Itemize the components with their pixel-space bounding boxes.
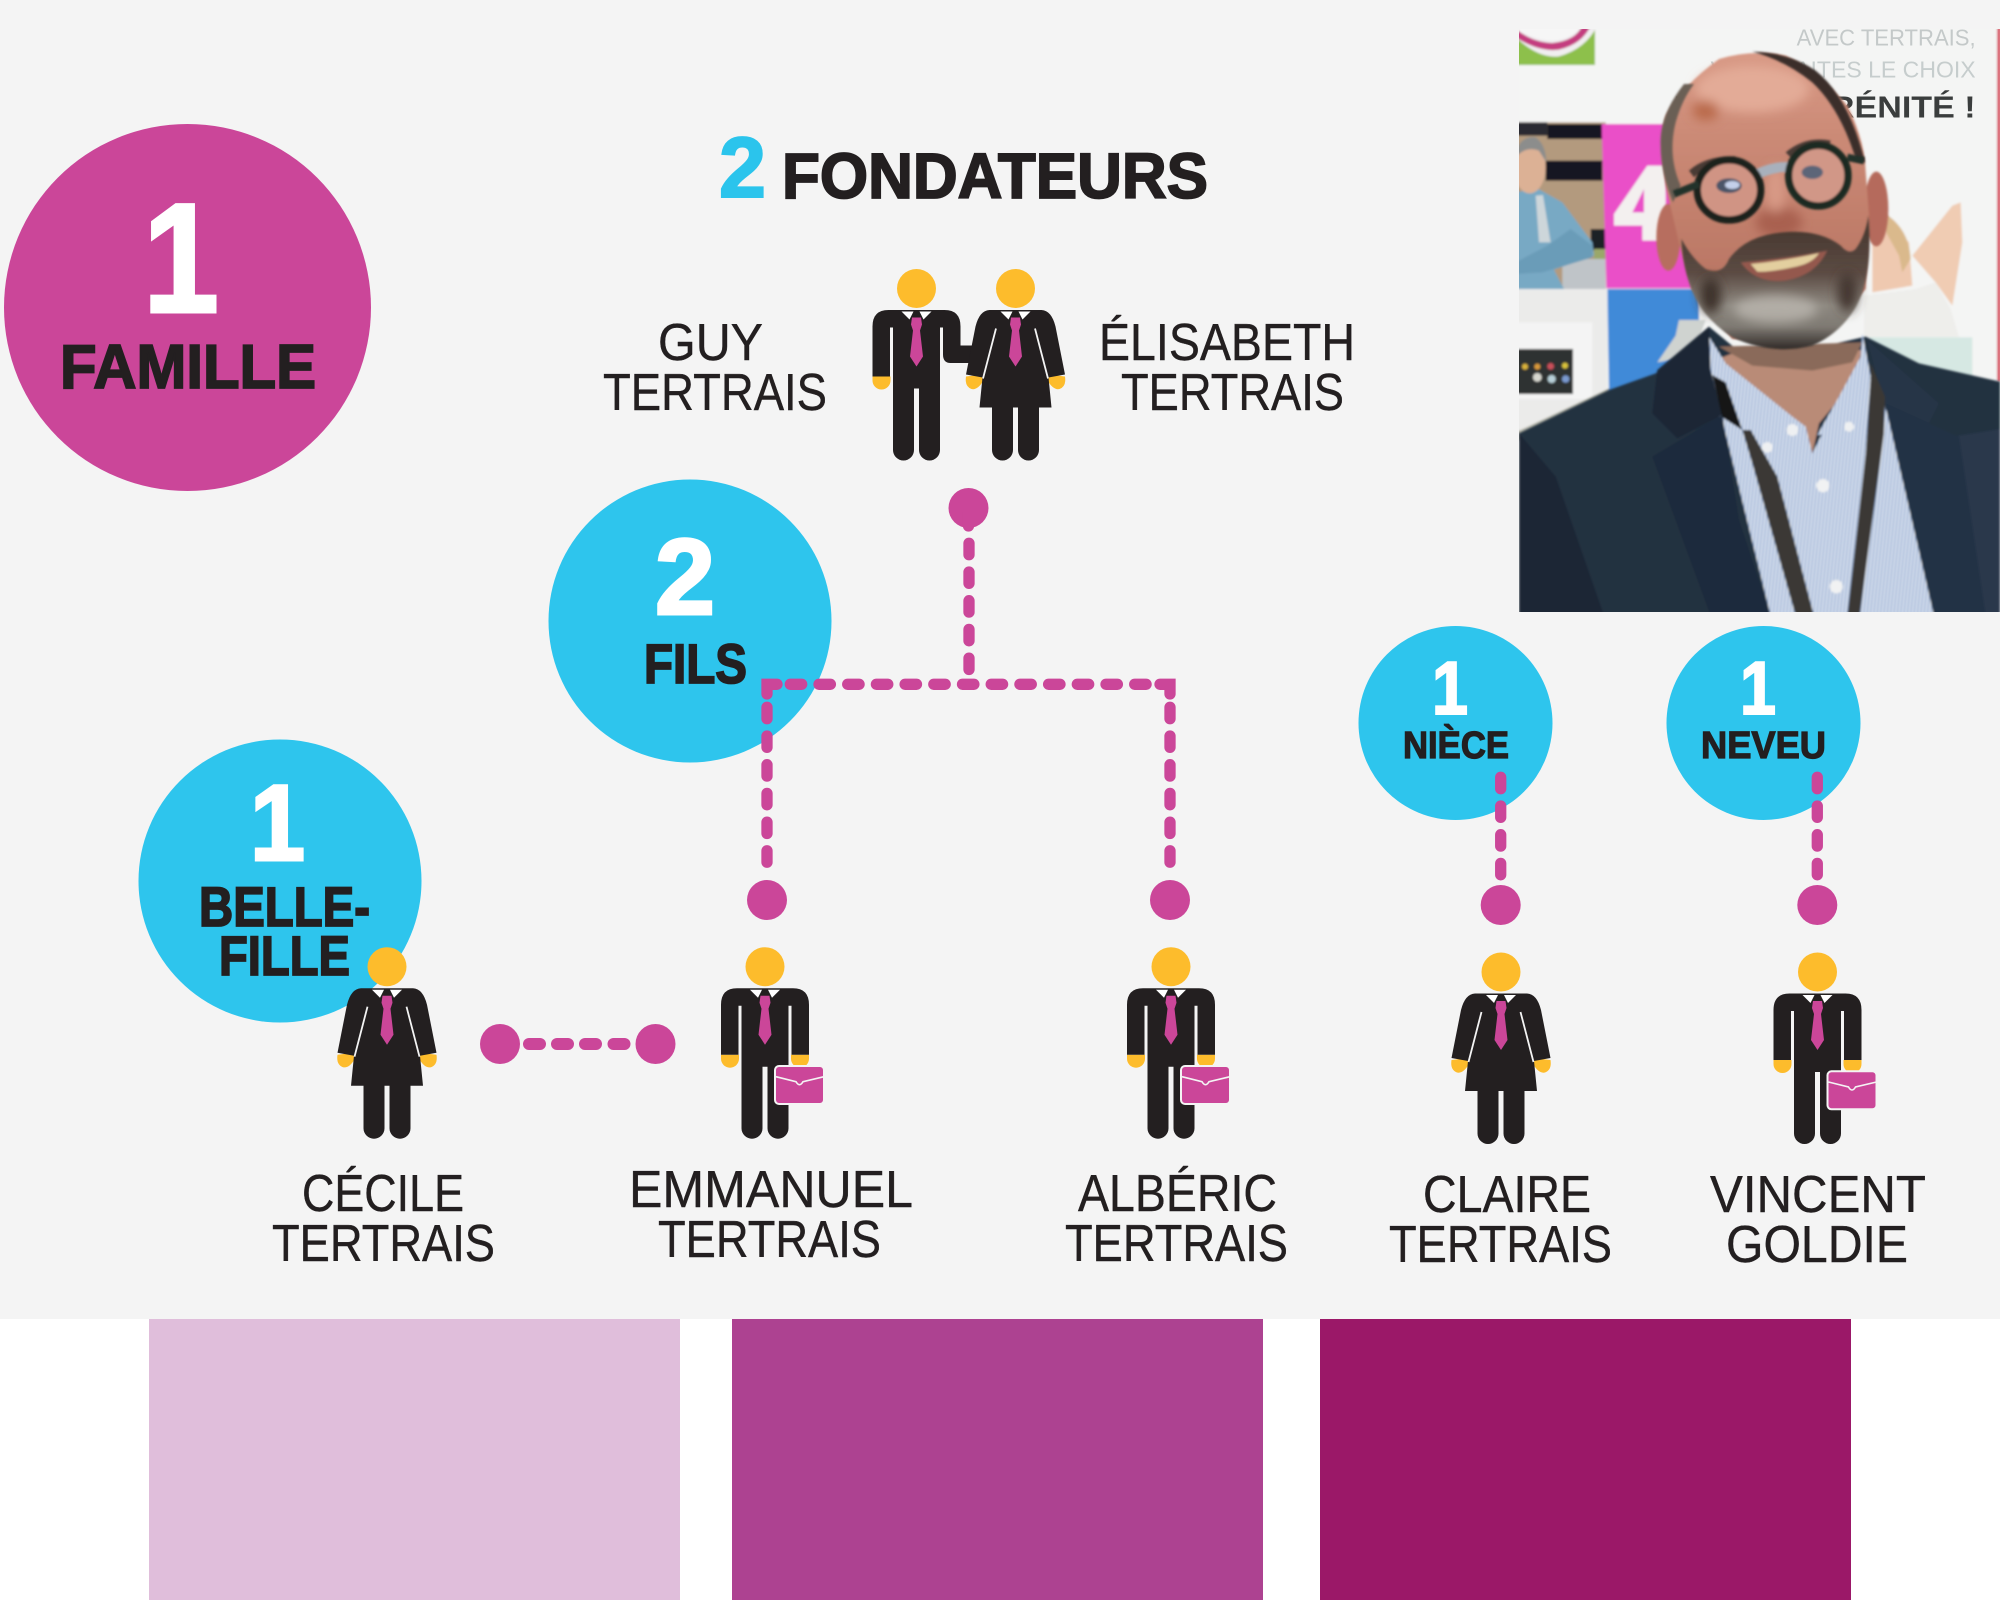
label: Claire Tertrais: CLAIRE: [1423, 1166, 1591, 1224]
badge: 1 belle-fille: [138, 740, 422, 1022]
badge: 1 nièce: [1358, 626, 1552, 820]
badge: 1 belle-fille: 1: [250, 762, 305, 883]
label: Cécile Tertrais: TERTRAIS: [272, 1215, 495, 1273]
badge: 1 neveu: [1666, 626, 1860, 820]
label: Cécile Tertrais: CÉCILE: [302, 1165, 464, 1223]
title: 2 fondateurs: FONDATEURS: [782, 140, 1208, 212]
title: 2 fondateurs: 2: [719, 121, 766, 216]
badge: 1 famille: [4, 124, 371, 491]
label: Albéric Tertrais: ALBÉRIC: [1078, 1165, 1277, 1223]
badge: 1 famille: FAMILLE: [60, 333, 316, 402]
label: Vincent Goldie: GOLDIE: [1726, 1216, 1908, 1274]
label: Cécile Tertrais: [272, 1165, 495, 1273]
poster text behind the man: VOUS FAITES LE CHOIX: [1711, 56, 1976, 82]
icon: Claire: [1451, 952, 1551, 1144]
icon: Albéric with briefcase: [1127, 947, 1230, 1139]
badge: 1 neveu: 1: [1740, 646, 1776, 730]
icon: Cécile: [337, 947, 437, 1139]
label: Vincent Goldie: [1710, 1166, 1926, 1274]
badge: 2 fils: 2: [655, 516, 715, 637]
label: Guy Tertrais: [603, 314, 827, 422]
colour swatch: mid magenta: [732, 1319, 1263, 1600]
badge: 1 belle-fille: FILLE: [219, 924, 350, 987]
label: Guy Tertrais: TERTRAIS: [603, 364, 827, 422]
badge: 1 nièce: 1: [1432, 646, 1468, 730]
label: Élisabeth Tertrais: [1099, 314, 1355, 422]
label: Élisabeth Tertrais: ÉLISABETH: [1099, 314, 1355, 372]
poster text behind the man: DE LA SÉRÉNITÉ !: [1674, 89, 1976, 124]
photo: portrait of a smiling man: [1514, 25, 2000, 616]
label: Emmanuel Tertrais: TERTRAIS: [658, 1211, 881, 1269]
connector: niece: [1481, 777, 1521, 925]
icon: Emmanuel with briefcase: [721, 947, 824, 1139]
badge: 1 neveu: NEVEU: [1701, 725, 1826, 767]
colour swatch: dark magenta: [1320, 1319, 1851, 1600]
colour swatch: light mauve: [149, 1319, 680, 1600]
label: Vincent Goldie: VINCENT: [1710, 1166, 1926, 1224]
label: Emmanuel Tertrais: EMMANUEL: [629, 1161, 913, 1219]
icon: Vincent with briefcase: [1774, 952, 1876, 1144]
badge: 2 fils: FILS: [644, 632, 747, 695]
badge: 1 famille: 1: [143, 172, 219, 346]
connector: family tree from founders to sons: [747, 488, 1190, 920]
badge: 2 fils: [548, 480, 832, 762]
badge: 1 nièce: NIÈCE: [1403, 723, 1509, 767]
label: Albéric Tertrais: TERTRAIS: [1065, 1215, 1288, 1273]
poster text behind the man: AVEC TERTRAIS,: [1797, 25, 1976, 51]
label: Guy Tertrais: GUY: [658, 314, 763, 372]
label: Élisabeth Tertrais: TERTRAIS: [1121, 364, 1344, 422]
connector: marriage of Cécile and Emmanuel: [480, 1024, 676, 1064]
poster text behind the man: [1676, 30, 1975, 118]
connector: nephew: [1797, 777, 1837, 925]
label: Claire Tertrais: TERTRAIS: [1389, 1216, 1612, 1274]
label: Claire Tertrais: [1389, 1166, 1612, 1274]
icon: founders Guy and Élisabeth holding hands: [872, 269, 1065, 460]
label: Emmanuel Tertrais: [629, 1161, 913, 1269]
badge: 1 belle-fille: BELLE-: [199, 875, 370, 938]
title: 2 fondateurs: [719, 121, 1208, 216]
label: Albéric Tertrais: [1065, 1165, 1288, 1273]
